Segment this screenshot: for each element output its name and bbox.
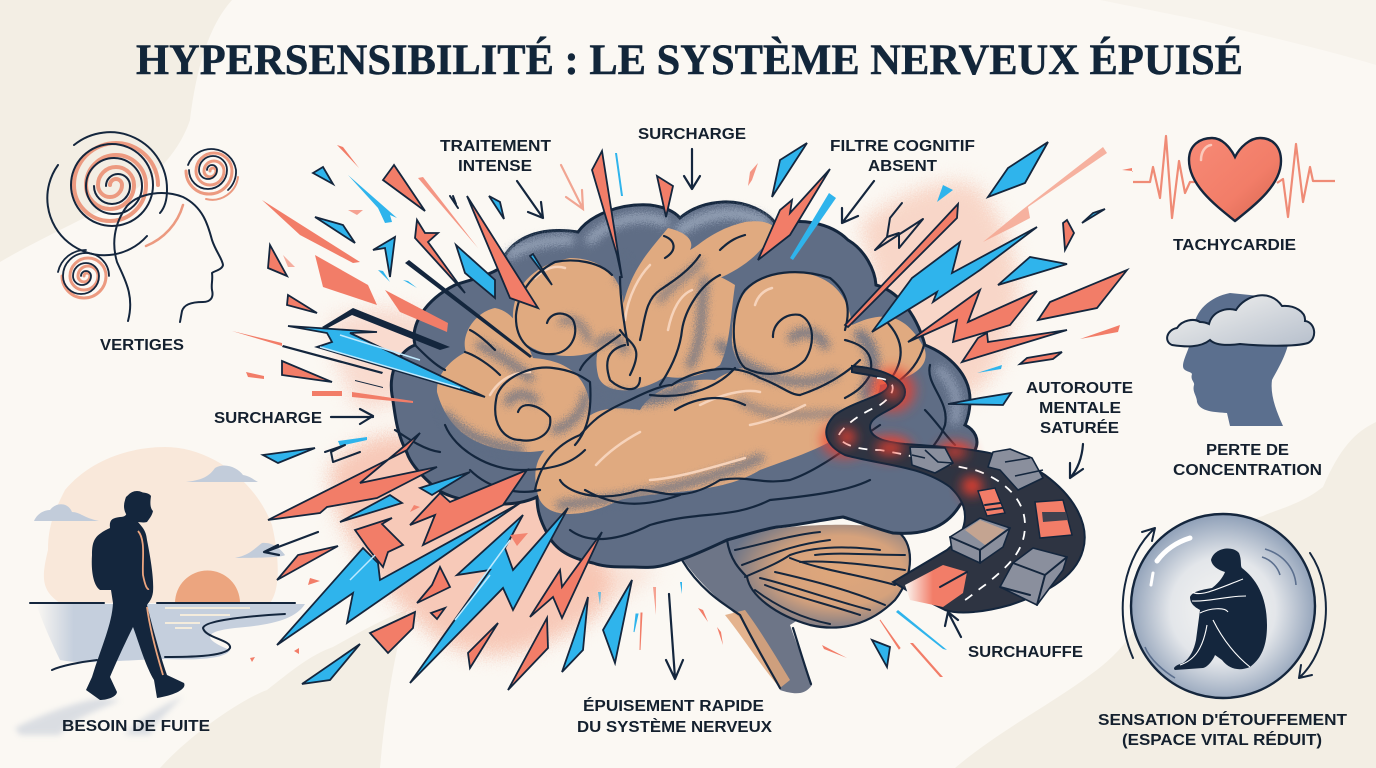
label: perte de concentration — [1173, 442, 1322, 479]
label: epuisement rapide: DU SYSTÈME NERVEUX — [577, 717, 772, 736]
arrow: epuisement — [666, 594, 683, 679]
label: sensation d'etouffement: SENSATION D'ÉTOUFFEMENT — [1098, 710, 1347, 729]
label: traitement intense — [440, 138, 551, 175]
label: autoroute mentale saturée: SATURÉE — [1040, 418, 1119, 437]
fold highlights — [490, 265, 805, 480]
spiral: small top right — [186, 149, 238, 200]
bubble highlights — [1157, 538, 1190, 561]
jacket and trouser stripes — [138, 531, 163, 675]
truck: red block — [905, 565, 967, 607]
label: autoroute mentale saturée: MENTALE — [1039, 400, 1121, 417]
light highlights on dark lobes — [510, 214, 957, 420]
cloud — [1167, 295, 1314, 346]
shards: right burst — [845, 142, 1133, 405]
pale sunset disc — [44, 447, 278, 603]
icon: person in bubble — [1123, 514, 1326, 698]
heart — [1189, 138, 1281, 221]
crouching figure — [1174, 549, 1267, 670]
label: filtre cognitif absent: ABSENT — [868, 158, 937, 175]
car: gray van right — [988, 449, 1043, 490]
label: filtre cognitif absent — [830, 138, 975, 175]
ground shadow — [15, 696, 183, 735]
shards: left and top-left burst — [232, 145, 552, 403]
arrow: flight to the left — [264, 532, 318, 555]
clouds — [34, 466, 285, 558]
horizon and shore lines — [30, 602, 295, 604]
label: traitement intense: INTENSE — [458, 158, 532, 175]
walker silhouette — [86, 492, 184, 700]
label: sensation d'etouffement — [1098, 710, 1347, 749]
label: autoroute mentale saturée: AUTOROUTE — [1026, 380, 1133, 397]
arrow: surchauffe — [945, 612, 961, 637]
arrow: surcharge left — [331, 409, 373, 424]
car: big red — [1035, 500, 1072, 538]
brain body (dark) — [391, 202, 977, 567]
grainy shading on folds — [445, 262, 873, 505]
label: filtre cognitif absent: FILTRE COGNITIF — [830, 138, 975, 155]
spiral: large — [47, 132, 183, 255]
label: vertiges: VERTIGES — [100, 337, 184, 354]
glow behind brain — [330, 182, 1018, 655]
car: small red — [978, 488, 1005, 516]
road: saturated mental highway — [826, 366, 1085, 612]
shards: top burst — [592, 143, 836, 278]
label: tachycardie: TACHYCARDIE — [1173, 237, 1296, 254]
label: epuisement rapide: ÉPUISEMENT RAPIDE — [583, 696, 764, 715]
brainstem — [682, 530, 830, 693]
label: perte de concentration: CONCENTRATION — [1173, 462, 1322, 479]
tan lobes — [437, 221, 926, 514]
label: epuisement rapide — [577, 696, 772, 736]
title: HYPERSENSIBILITÉ : LE SYSTÈME NERVEUX ÉPUISÉ — [136, 37, 1243, 84]
head outline — [114, 193, 223, 322]
label: surchauffe: SURCHAUFFE — [968, 644, 1083, 661]
label: surcharge left: SURCHARGE — [214, 410, 322, 427]
spiral: small bottom left — [58, 250, 109, 298]
label: surcharge top: SURCHARGE — [638, 126, 746, 143]
icon: vertigo head with spirals — [47, 132, 238, 322]
label: besoin de fuite: BESOIN DE FUITE — [62, 718, 210, 735]
arrow: filtre cognitif — [842, 181, 874, 223]
walker head — [124, 491, 150, 521]
arrow: traitement intense — [517, 181, 543, 218]
icon: heart with pulse — [1133, 136, 1335, 221]
icon: head in a cloud — [1167, 293, 1314, 426]
car: gray van — [910, 447, 953, 473]
bubble — [1131, 514, 1315, 698]
icon: walker at the seaside — [15, 447, 305, 735]
head silhouette — [1183, 293, 1290, 426]
pale arrow — [561, 165, 583, 209]
label: perte de concentration: PERTE DE — [1206, 442, 1289, 459]
arrow: autoroute — [1070, 444, 1083, 478]
label: sensation d'etouffement: (ESPACE VITAL RÉDUIT) — [1122, 730, 1322, 749]
arrow: surcharge top — [684, 149, 700, 189]
pulse line — [1133, 136, 1335, 218]
truck: gray — [950, 518, 1010, 563]
label: autoroute mentale saturée — [1026, 380, 1133, 437]
sun — [175, 570, 240, 603]
water — [36, 604, 305, 662]
fold lines — [395, 235, 955, 539]
red glow under road — [821, 368, 989, 501]
label: traitement intense: TRAITEMENT — [440, 138, 551, 155]
shards: bottom burst — [598, 582, 947, 677]
rotation arrows — [1123, 528, 1155, 658]
shards: lower left burst — [250, 433, 632, 690]
red hot spots on road — [839, 385, 982, 495]
car: gray front — [1000, 548, 1067, 605]
brain — [391, 202, 977, 693]
cerebellum — [727, 525, 910, 628]
